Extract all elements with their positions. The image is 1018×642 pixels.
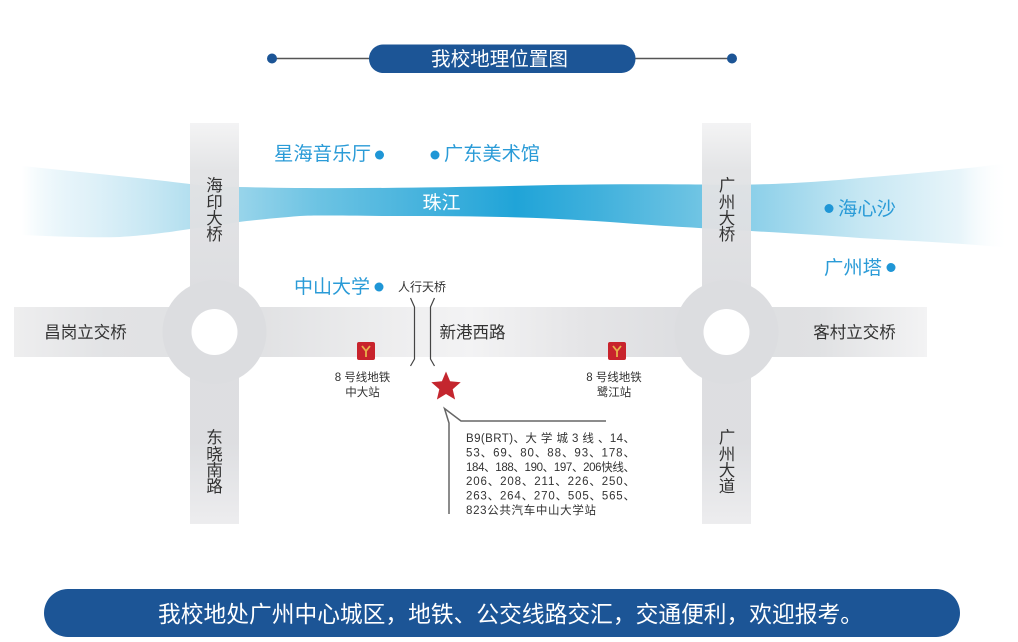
- road label: 东晓南路: 路: [206, 477, 223, 496]
- metro label: 中大站: 8 号线地铁: [335, 370, 391, 384]
- road: east-west Xingang West Road: [14, 307, 927, 357]
- road label: 客村立交桥: 客村立交桥: [813, 323, 896, 342]
- roundabout: east: [674, 280, 778, 384]
- river: Pearl River: [22, 163, 1010, 248]
- callout pointer: [444, 408, 606, 514]
- metro label: 中大站: 中大站: [345, 385, 380, 399]
- road label: 海印大桥: 桥: [206, 225, 223, 244]
- road label: 海印大桥: [206, 176, 223, 244]
- bus routes text: 263、264、270、505、565、: [466, 490, 635, 502]
- road label: 广州大桥: 广: [719, 176, 735, 195]
- road label: 海印大桥: 印: [206, 193, 223, 212]
- road label: 东晓南路: 东: [206, 428, 223, 447]
- icon: school location star: [431, 372, 461, 400]
- road label: 东晓南路: [206, 428, 223, 496]
- title bar: 我校地理位置图: [431, 48, 568, 70]
- landmark: 广州塔: 广州塔: [824, 257, 882, 279]
- road: Haiyin Bridge to Dongxiao Road: [190, 123, 239, 524]
- bridge: 人行天桥: [398, 280, 446, 366]
- road label: 东晓南路: 晓: [206, 445, 223, 464]
- road label: 广州大道: [719, 428, 735, 496]
- road label: 广州大道: 广: [719, 428, 735, 447]
- metro label: 鹭江站: 鹭江站: [597, 385, 632, 399]
- road label: 广州大桥: 大: [719, 209, 735, 228]
- road: Guangzhou Bridge to Guangzhou Avenue: [702, 123, 751, 524]
- bus routes text: [466, 431, 635, 517]
- road label: 广州大道: 道: [719, 477, 735, 496]
- bus routes text: 53、69、80、88、93、178、: [466, 448, 635, 460]
- roundabout: west: [162, 280, 266, 384]
- bus routes text: B9(BRT)、大 学 城 3 线 、14、: [466, 431, 635, 445]
- metro label: 鹭江站: [586, 370, 642, 399]
- bus routes text: 823公共汽车中山大学站: [466, 503, 596, 517]
- landmark: 中山大学: 中山大学: [294, 276, 370, 298]
- landmark: 星海音乐厅: 星海音乐厅: [274, 143, 371, 165]
- icon: metro Lujiang station: [608, 342, 626, 360]
- landmark: 广东美术馆: 广东美术馆: [444, 143, 540, 165]
- road label: 广州大桥: [719, 176, 735, 244]
- bus routes text: 184、188、190、197、206快线、: [466, 460, 635, 474]
- road label: 昌岗立交桥: 昌岗立交桥: [44, 323, 127, 342]
- road label: 新港西路: 新港西路: [440, 323, 506, 342]
- bridge: 人行天桥: 人行天桥: [398, 280, 446, 294]
- road label: 海印大桥: 大: [206, 209, 223, 228]
- road label: 东晓南路: 南: [206, 461, 223, 480]
- bus routes text: 206、208、211、226、250、: [466, 476, 635, 488]
- title bar: [267, 44, 737, 73]
- road label: 广州大桥: 桥: [719, 225, 735, 244]
- icon: metro Zhongda station: [357, 342, 375, 360]
- road label: 海印大桥: 海: [206, 176, 223, 195]
- metro label: 中大站: [335, 370, 391, 399]
- road label: 广州大道: 州: [719, 446, 735, 464]
- metro label: 鹭江站: 8 号线地铁: [586, 370, 642, 384]
- road label: 广州大道: 大: [719, 461, 735, 480]
- landmark: 海心沙: 海心沙: [838, 198, 896, 220]
- bottom summary banner: [44, 589, 960, 637]
- road label: 广州大桥: 州: [719, 194, 735, 212]
- bottom summary banner: 我校地处广州中心城区，地铁、公交线路交汇，交通便利，欢迎报考。: [158, 601, 863, 627]
- river label: 珠江: 珠江: [422, 192, 461, 214]
